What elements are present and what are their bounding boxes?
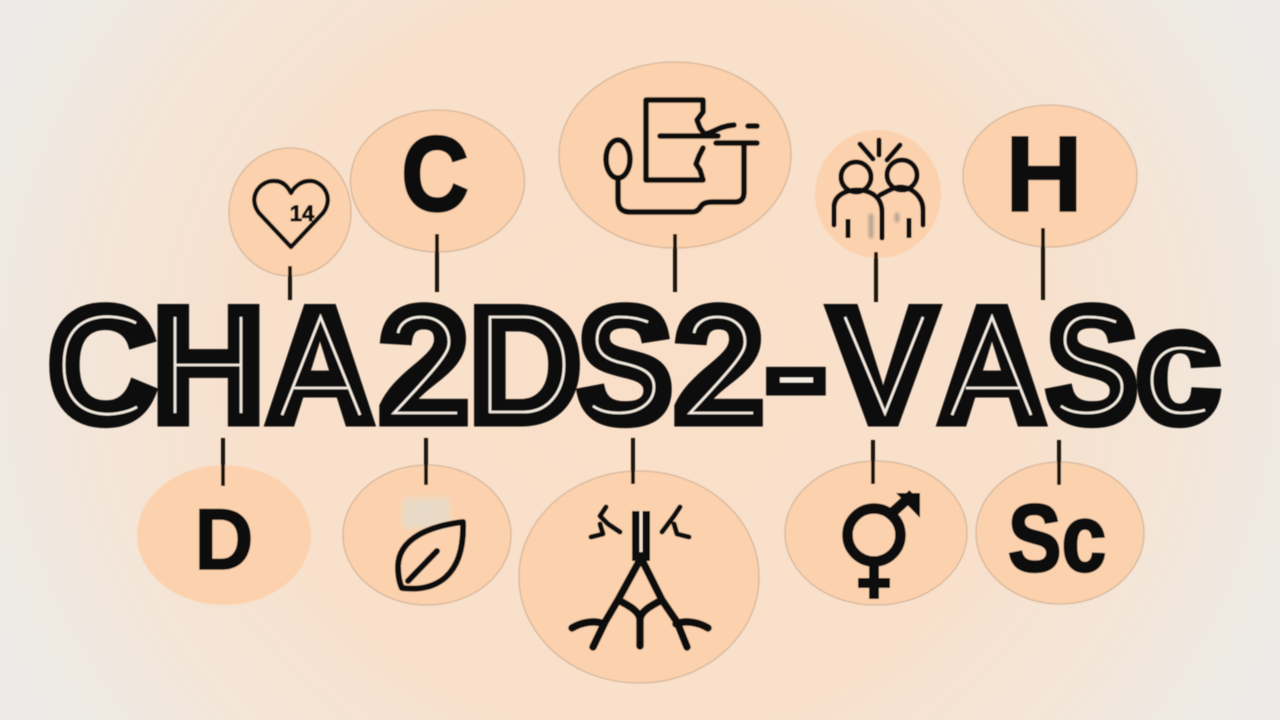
- icon: two people: [834, 140, 923, 238]
- node: vascular people: [815, 130, 941, 258]
- title: CHA2DS2-VASc: C: [47, 272, 157, 457]
- diagram: [47, 62, 1221, 683]
- title: CHA2DS2-VASc: [47, 272, 1221, 460]
- title inline strokes: [64, 317, 1205, 415]
- node: letter D: D: [195, 491, 253, 587]
- node: letter H: H: [1005, 113, 1083, 234]
- node: leaf: [343, 465, 511, 605]
- node: letter C: C: [402, 114, 468, 232]
- title: CHA2DS2-VASc: H: [151, 274, 266, 458]
- node: letters Sc: [976, 462, 1144, 604]
- icon: gender symbol: [848, 493, 920, 599]
- node: vessels: [519, 471, 759, 683]
- connector lines: [223, 228, 1059, 486]
- icon: leaf: [398, 522, 463, 589]
- icon: blood pressure monitor: [606, 100, 757, 212]
- title: CHA2DS2-VASc: D: [468, 274, 582, 458]
- title: CHA2DS2-VASc: S: [1045, 273, 1139, 458]
- icon: heart with 14: 14: [290, 201, 315, 226]
- title: CHA2DS2-VASc: 2: [378, 273, 470, 457]
- title: CHA2DS2-VASc: c: [1135, 273, 1221, 457]
- node: letter H: [963, 105, 1137, 247]
- node: letter D: [137, 465, 311, 605]
- icon: branching artery: [572, 507, 708, 647]
- node: blood pressure cuff: [559, 62, 791, 248]
- node: age heart: [229, 148, 351, 276]
- node: letter C: [350, 110, 524, 252]
- title: CHA2DS2-VASc: S: [577, 272, 673, 457]
- title: CHA2DS2-VASc: 2: [673, 273, 765, 457]
- title: CHA2DS2-VASc: A: [938, 273, 1046, 458]
- node: letters Sc: Sc: [1008, 484, 1106, 592]
- title: CHA2DS2-VASc: -: [764, 275, 828, 460]
- node: sex symbol: [785, 461, 967, 605]
- title: CHA2DS2-VASc: A: [266, 273, 374, 458]
- title: CHA2DS2-VASc: V: [829, 272, 937, 457]
